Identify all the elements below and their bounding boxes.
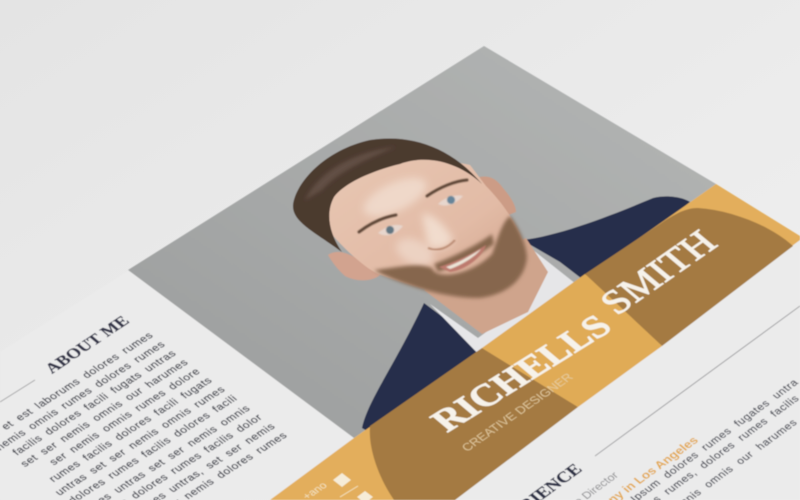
band translucent middle tone (482, 274, 662, 407)
eyes (378, 195, 463, 235)
panel: about me (0, 312, 290, 500)
contact icons (300, 473, 373, 500)
name: RICHELLS: RICHELLS (423, 309, 621, 439)
panel: portrait photo (128, 46, 716, 450)
heading: about me: ABOUT ME (41, 312, 133, 377)
ears (328, 176, 516, 280)
band dark section left (370, 348, 578, 500)
hair highlight (305, 147, 395, 200)
about me body text: ser nemis omnis rumes dolore (47, 366, 203, 467)
shirt collar (430, 246, 576, 362)
about me body text (0, 330, 290, 500)
about me divider (0, 380, 35, 402)
cheek highlights (358, 170, 438, 271)
panel: name band (270, 184, 800, 500)
beard (374, 216, 527, 298)
experience divider (595, 306, 800, 456)
moustache (434, 234, 494, 272)
nose (422, 214, 455, 250)
about me body text: set ser nemis omnis our harumes (18, 357, 191, 469)
about me body text: untras set ser nemis omnis rumes (53, 384, 228, 498)
neck (424, 238, 548, 334)
about me body text: rumes facilis dolores facili fugats (47, 375, 215, 484)
name: SMITH: SMITH (591, 224, 726, 322)
mouth (439, 245, 486, 272)
jacket (362, 196, 690, 450)
eyebrows (359, 180, 467, 232)
hair (293, 139, 482, 252)
subtitle: creative designer: CREATIVE DESIGNER (459, 371, 576, 454)
panel: experience (475, 306, 800, 500)
face (322, 150, 527, 298)
about me body text: facilis dolores facili fugats untras (10, 348, 179, 458)
band dark section right (585, 208, 793, 346)
band base light amber (270, 184, 800, 500)
